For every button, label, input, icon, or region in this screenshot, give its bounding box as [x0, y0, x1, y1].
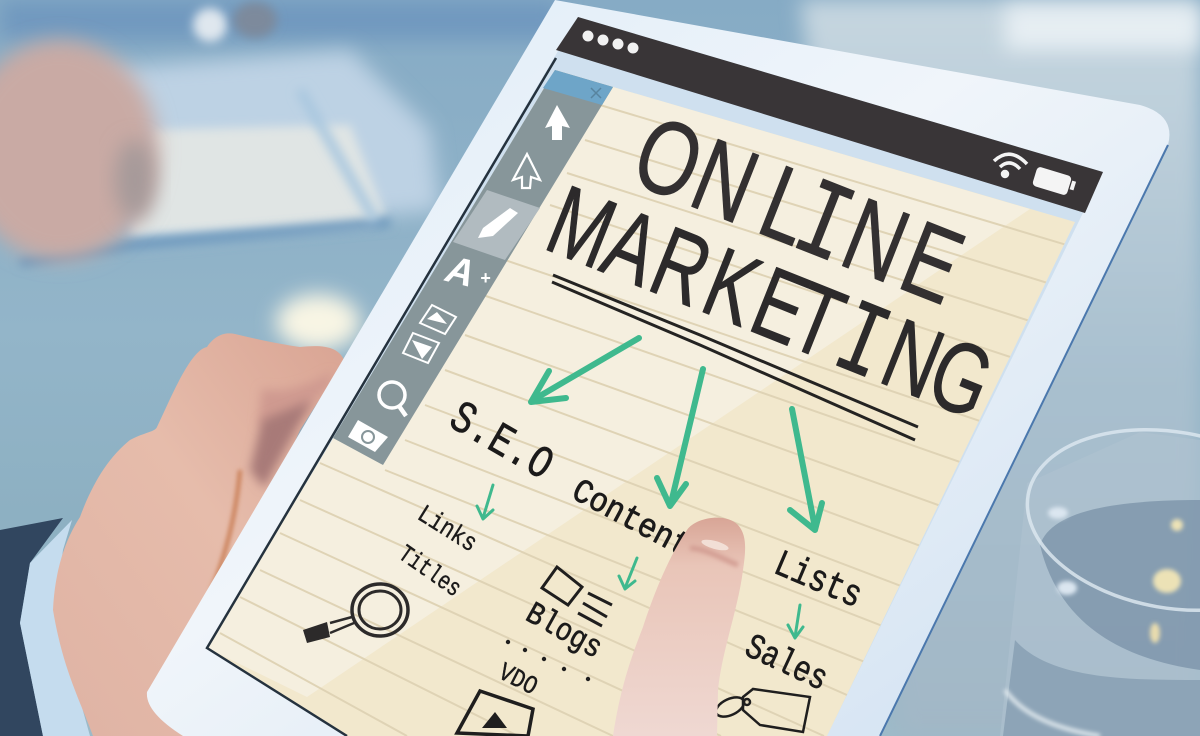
fingernail edge — [690, 548, 738, 565]
icon: solid cursor — [545, 105, 570, 140]
thumb tip shading — [258, 372, 332, 425]
icon: up button — [420, 305, 456, 334]
label: Lists: Lists — [767, 544, 868, 619]
icon: video player — [457, 691, 533, 736]
paper background — [207, 70, 1075, 736]
water surface — [1040, 500, 1200, 670]
icon: font size: A — [441, 248, 479, 296]
heading: online: ONLINE — [615, 92, 979, 337]
double underline — [552, 275, 918, 440]
icon: camera — [348, 420, 388, 452]
lower water — [1003, 640, 1200, 736]
screen edge line — [207, 58, 556, 736]
icon: battery — [1032, 166, 1076, 196]
heading: marketing: MARKETING — [529, 165, 1008, 450]
icon: search — [379, 382, 406, 416]
shaded fingers behind tablet — [250, 400, 312, 488]
shirt sleeve — [0, 518, 63, 736]
paper glare — [207, 70, 1030, 697]
palm crease — [212, 470, 240, 590]
dotted row — [506, 640, 590, 681]
nail highlight — [700, 538, 730, 552]
tablet right edge — [880, 145, 1168, 736]
icon: wifi — [994, 154, 1027, 176]
close mark — [591, 88, 601, 98]
icon: price tag — [713, 689, 810, 732]
hand holding the tablet — [53, 333, 345, 736]
label: VDO: VDO — [493, 659, 542, 703]
arrows: main green arrows — [531, 338, 822, 530]
label: Content: Content — [565, 472, 697, 567]
label: Blogs: Blogs — [519, 595, 608, 667]
icon: magnifying glass — [303, 584, 408, 643]
top status bar — [556, 17, 1103, 213]
status dots — [582, 30, 638, 54]
icon: blog folder — [542, 567, 612, 626]
highlighted pencil row — [453, 190, 540, 260]
label: Links: Links — [411, 500, 482, 560]
tool panel: + — [480, 268, 491, 288]
glass rim — [1026, 428, 1200, 612]
water highlights — [1005, 507, 1183, 736]
pointing finger — [613, 518, 745, 736]
panel header — [543, 70, 613, 105]
icon: down button — [403, 333, 439, 363]
icon: outlined cursor — [513, 154, 540, 188]
ruled paper lines — [220, 105, 1080, 736]
label: Titles: Titles — [393, 540, 467, 604]
tool panel — [333, 70, 613, 465]
tablet screen — [207, 17, 1103, 736]
label: S.E.O: S.E.O — [440, 392, 562, 493]
label: Sales: Sales — [738, 627, 834, 701]
glass body — [1000, 432, 1200, 736]
icon: pencil — [478, 208, 518, 238]
small arrows — [477, 485, 803, 638]
shirt cuff — [20, 520, 90, 736]
glass of water — [1000, 408, 1200, 736]
